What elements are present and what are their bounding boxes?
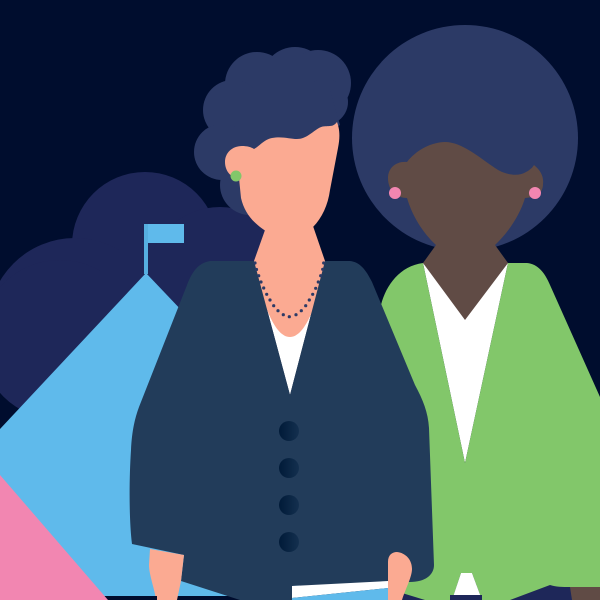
woman right: shirt	[423, 263, 508, 463]
button 4	[279, 532, 299, 552]
woman right: face, hair and neck	[388, 142, 543, 320]
lower band right	[380, 585, 600, 600]
woman right: navy strip at shirt hem	[450, 595, 482, 600]
woman left: shirt	[254, 261, 325, 395]
woman right: green cardigan	[381, 263, 600, 600]
button 3	[279, 495, 299, 515]
woman left: navy jacket	[130, 261, 434, 600]
woman left: left hand	[149, 549, 184, 600]
woman left: right hand	[388, 552, 412, 600]
white paper	[292, 581, 388, 598]
woman right: hand	[570, 587, 600, 600]
woman right: right earring	[529, 187, 541, 199]
pink mountain	[0, 475, 108, 600]
woman right: afro hair	[352, 25, 578, 251]
mountain with flag	[0, 224, 300, 596]
blue paper	[292, 588, 388, 600]
woman left: neck and chest	[254, 226, 325, 337]
woman right: left earring	[389, 187, 401, 199]
button 1	[279, 421, 299, 441]
bottom ground strip	[108, 596, 157, 600]
woman left: face and ear	[225, 122, 339, 235]
necklace	[253, 261, 325, 318]
woman left: green earring	[230, 170, 242, 182]
cloud behind mountain	[0, 172, 293, 420]
woman right: shirt hem	[452, 573, 482, 600]
button 2	[279, 458, 299, 478]
woman left: curly hair	[194, 47, 351, 215]
